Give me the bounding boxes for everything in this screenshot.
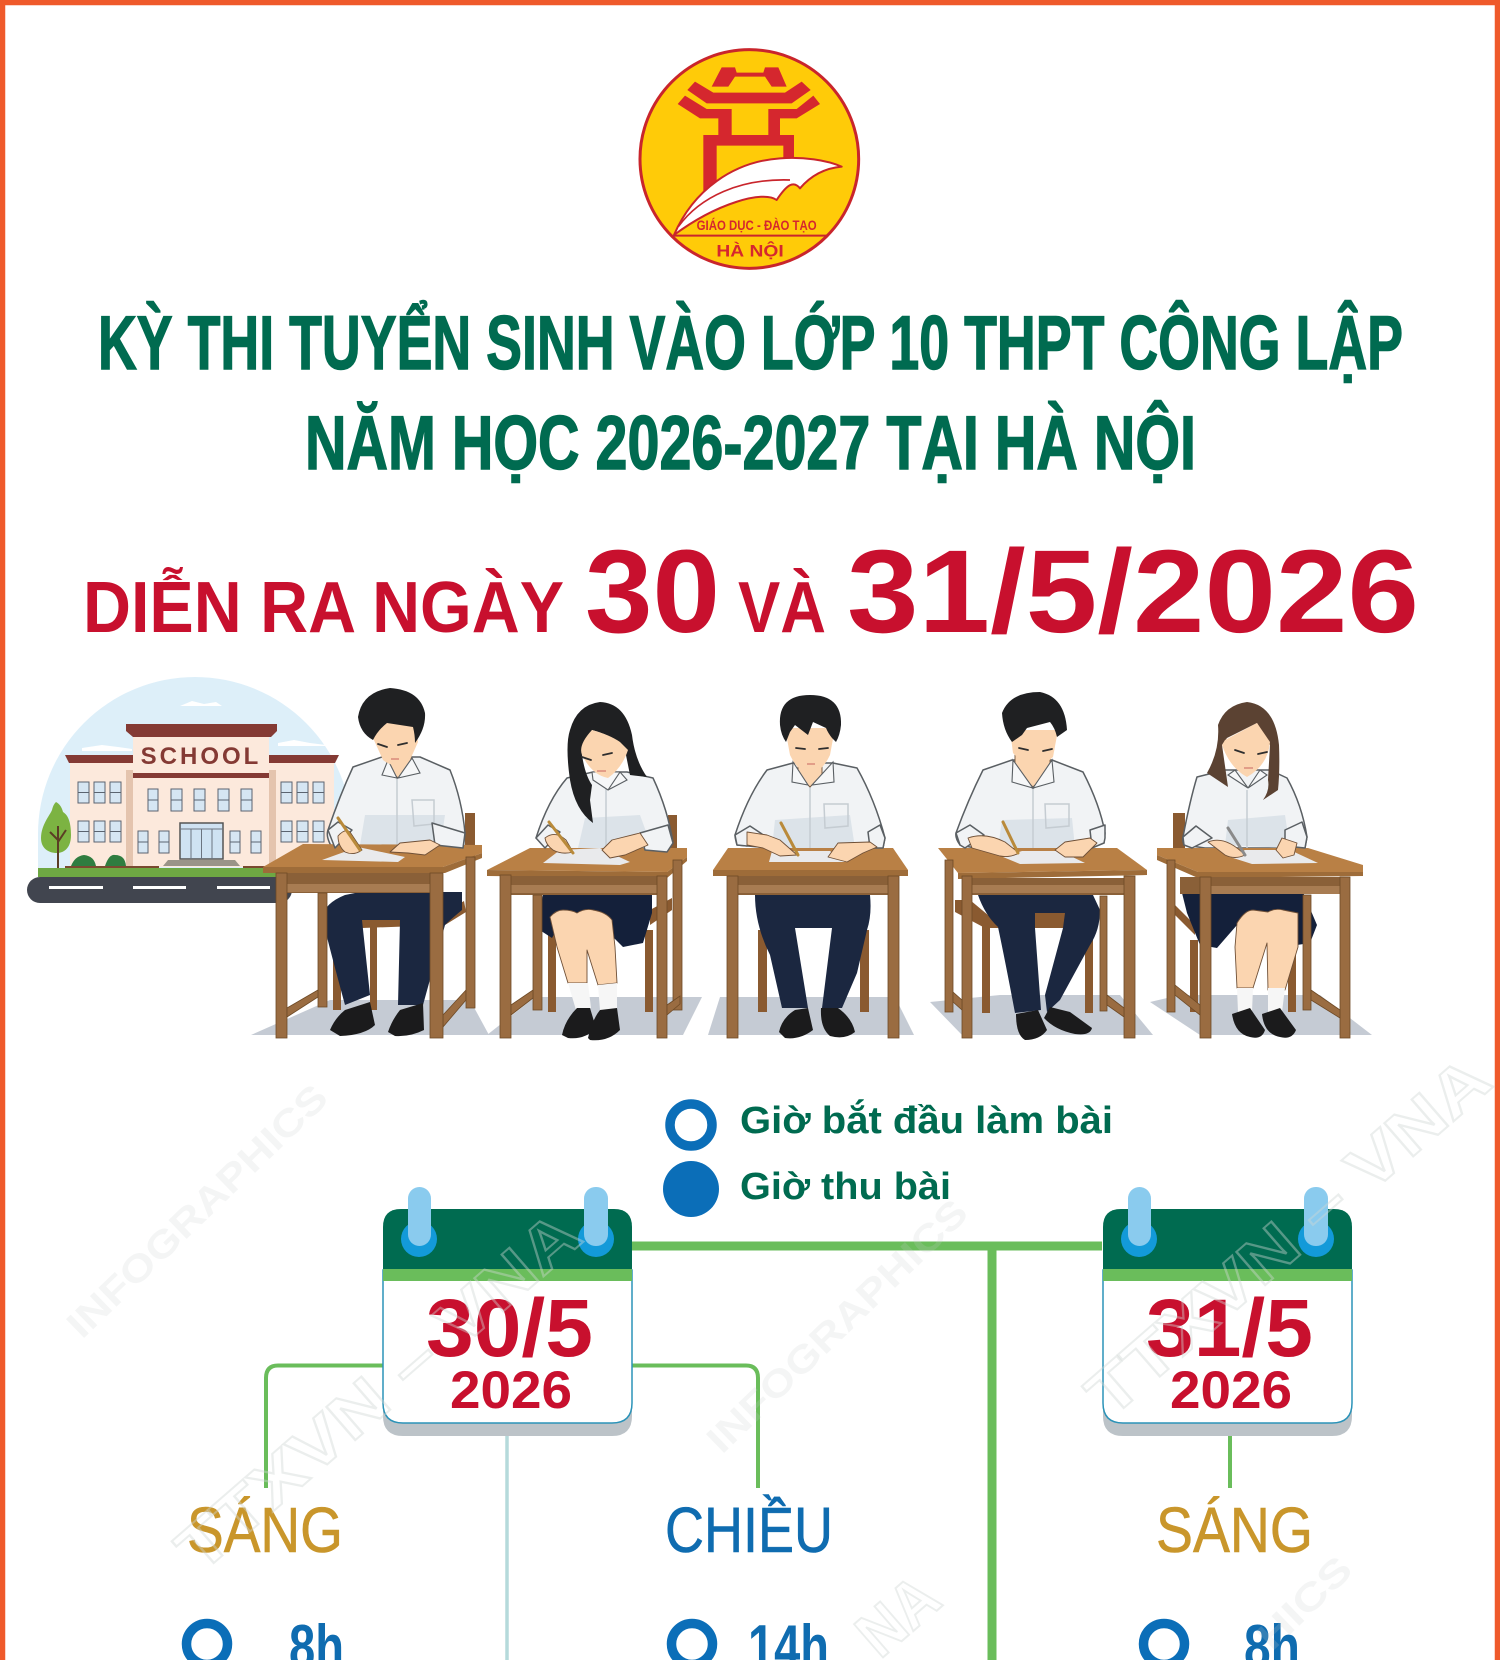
legend <box>663 1098 1113 1217</box>
session: morning 30/5: SÁNG <box>187 1494 343 1566</box>
calendar: 30/5 <box>383 1187 632 1436</box>
calendar: 30/5: 2026 <box>450 1361 572 1420</box>
logo: Hanoi Education and Training emblem: HÀ NỘI <box>716 242 784 261</box>
title: NĂM HỌC 2026-2027 TẠI HÀ NỘI <box>305 401 1196 486</box>
student 4 at desk <box>930 692 1153 1040</box>
illustration: school building <box>27 677 352 903</box>
session: morning 31/5: SÁNG <box>1156 1494 1313 1566</box>
session: afternoon 30/5: CHIỀU <box>665 1494 833 1566</box>
logo: Hanoi Education and Training emblem <box>640 50 859 268</box>
logo: Hanoi Education and Training emblem: GIÁO DỤC - ĐÀO TẠO <box>697 217 817 233</box>
title <box>98 300 1403 486</box>
watermark: repeated agency marks <box>59 1042 1500 1660</box>
calendar: 31/5 <box>1103 1187 1352 1436</box>
student 1 at desk <box>251 688 489 1038</box>
watermark: repeated agency marks: INFOGRAPHICS <box>59 1077 336 1346</box>
headline date: VÀ <box>738 568 826 648</box>
headline date: 30 <box>585 526 720 658</box>
student 3 at desk <box>708 695 914 1038</box>
illustration: school building: SCHOOL <box>141 743 261 770</box>
watermark: repeated agency marks: TTXVN – VNA <box>162 1197 594 1586</box>
calendar: 30/5: 30/5 <box>426 1283 593 1374</box>
session: morning 30/5 <box>186 1494 344 1660</box>
legend: Giờ thu bài <box>740 1166 951 1208</box>
session: morning 31/5 <box>1144 1494 1313 1660</box>
student 5 at desk <box>1150 702 1372 1038</box>
headline date: DIỄN RA NGÀY <box>83 567 564 648</box>
headline date <box>83 526 1419 658</box>
session: afternoon 30/5 <box>665 1494 833 1660</box>
student 2 at desk <box>487 702 702 1040</box>
watermark: repeated agency marks: HICS <box>1249 1548 1361 1658</box>
calendar: 31/5: 31/5 <box>1146 1283 1313 1374</box>
connector lines <box>266 1246 1230 1660</box>
watermark: repeated agency marks: TTXVN – VNA <box>1072 1042 1500 1431</box>
watermark: repeated agency marks: INFOGRAPHICS <box>699 1192 976 1461</box>
headline date: 31/5/2026 <box>847 526 1419 658</box>
legend: Giờ bắt đầu làm bài <box>740 1098 1113 1142</box>
calendar: 31/5: 2026 <box>1170 1361 1292 1420</box>
